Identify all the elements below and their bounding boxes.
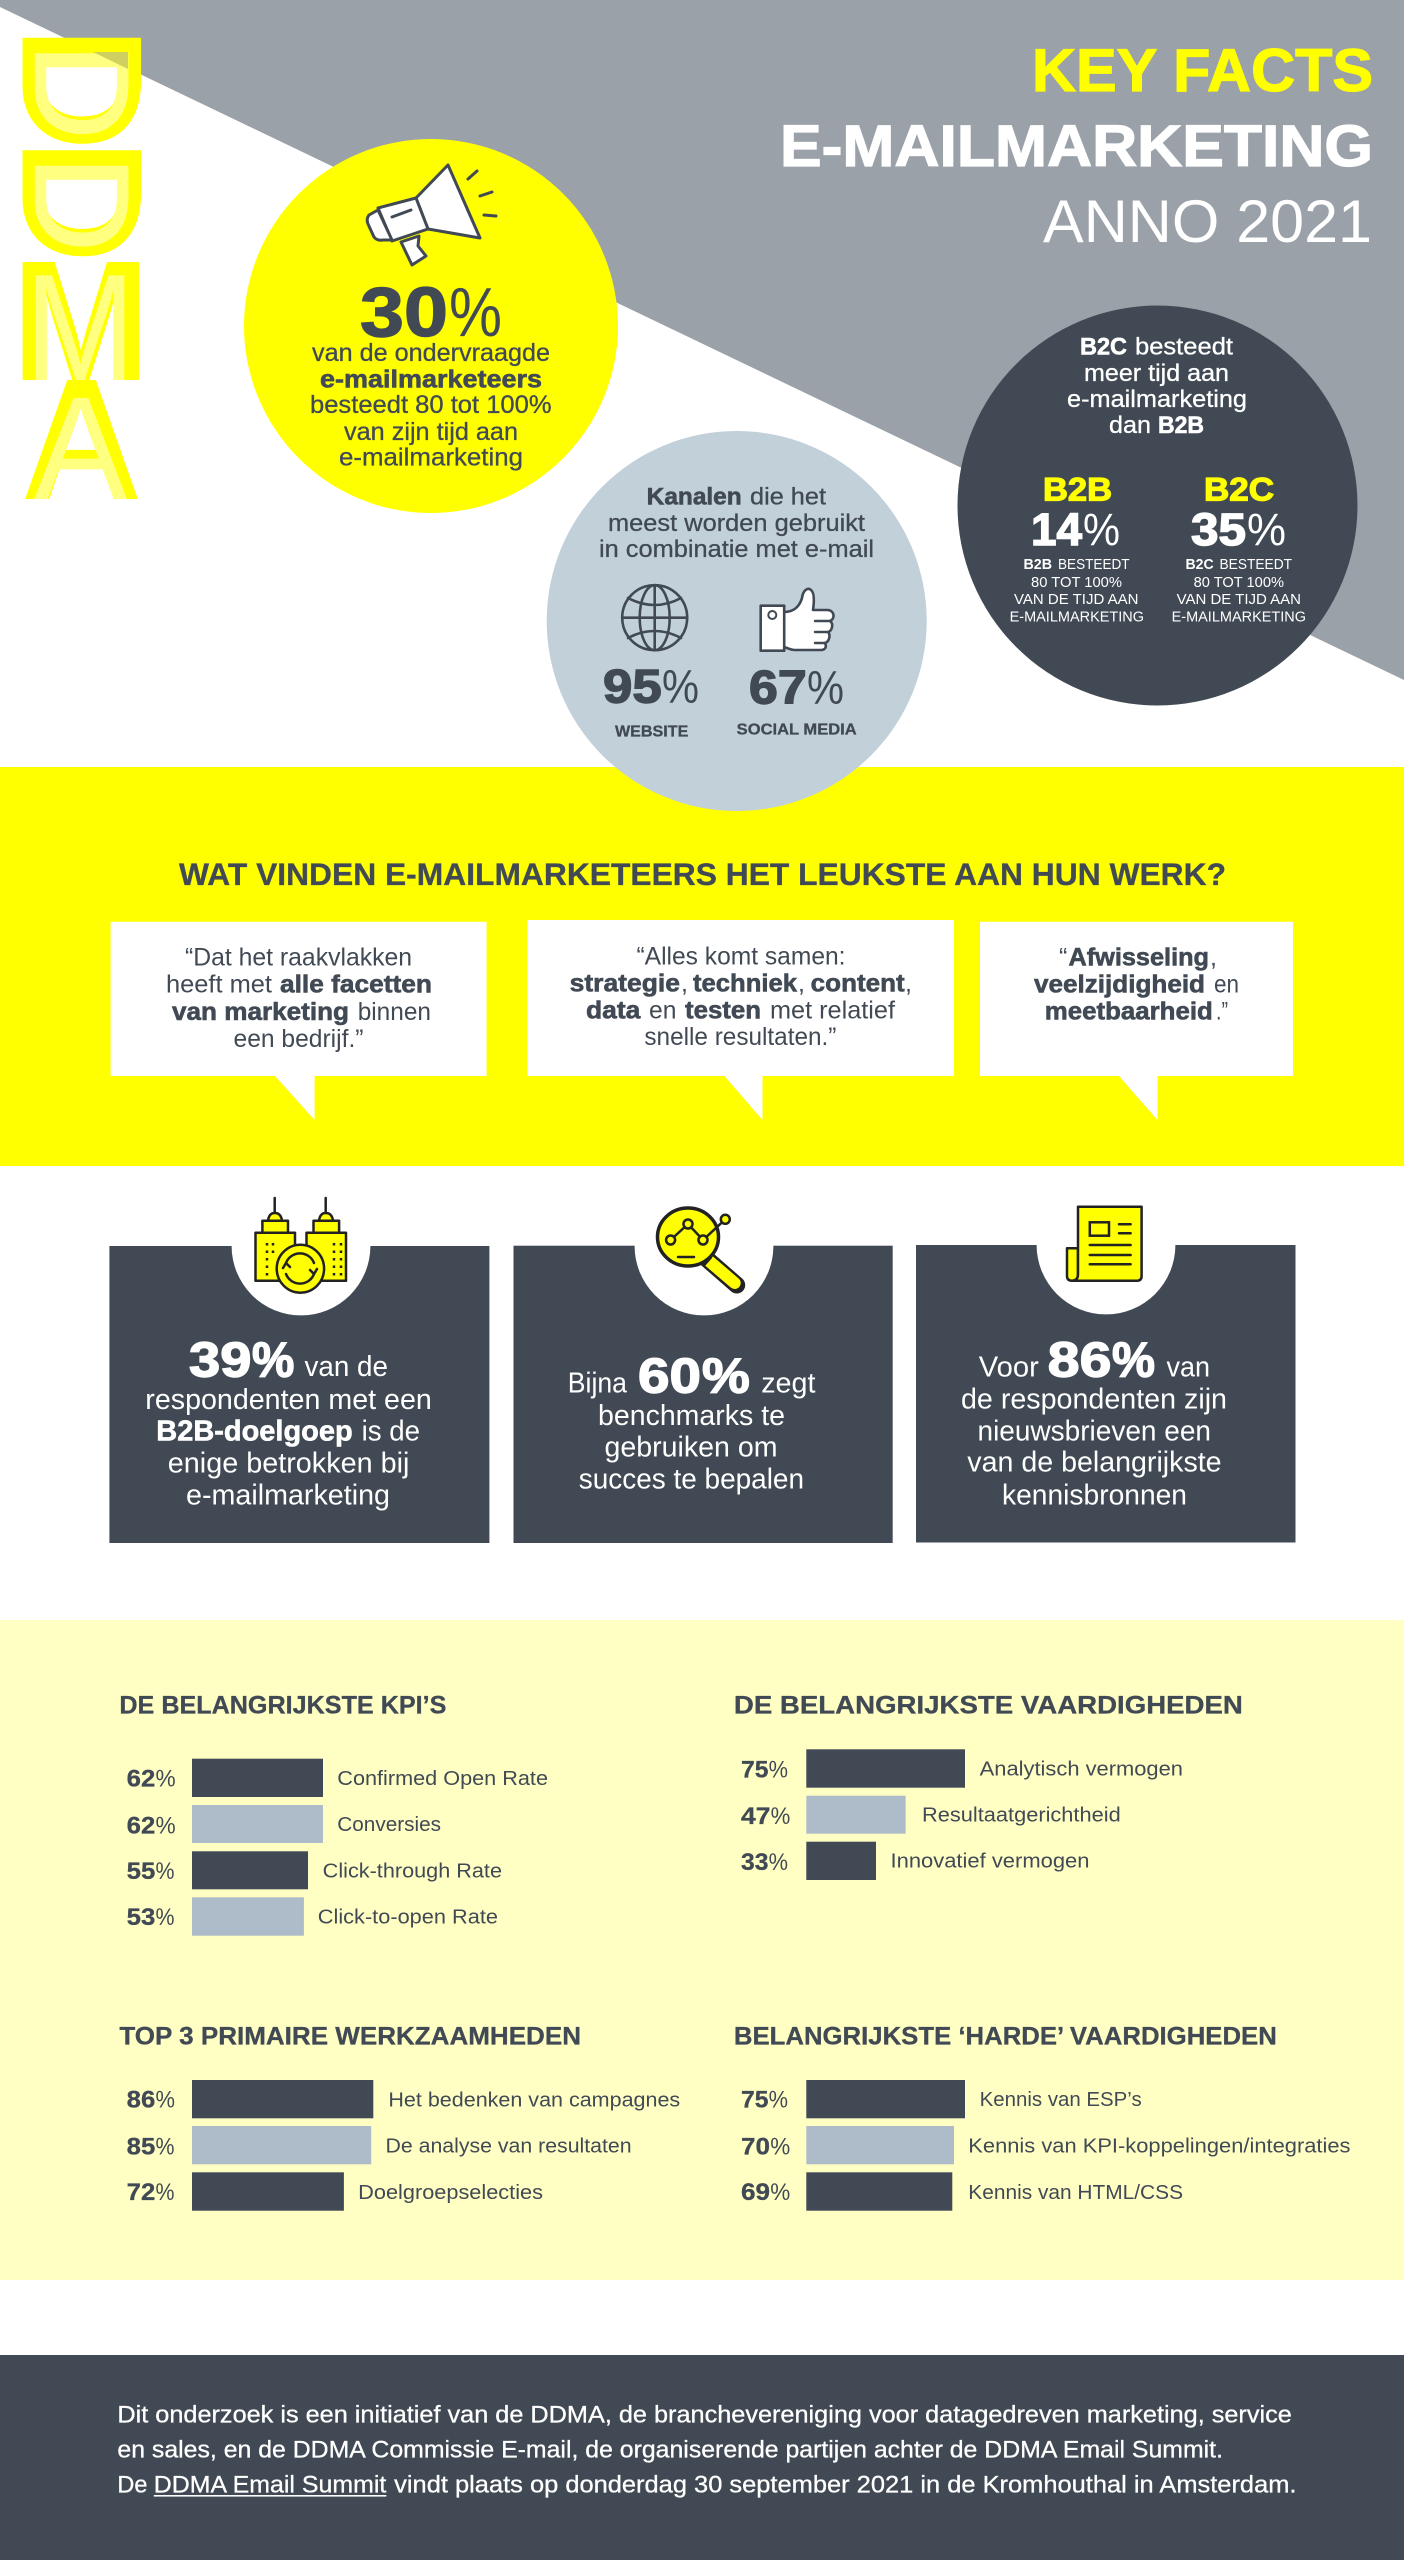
bar row: De analyse van resultaten: % — [156, 2133, 174, 2160]
text: intro: dan — [1109, 412, 1151, 439]
icon: magnifier with graph — [658, 1208, 737, 1285]
heading: KPI's: DE BELANGRIJKSTE KPI’S — [119, 1691, 446, 1719]
bar row: Click-to-open Rate: % — [156, 1904, 174, 1931]
text: card 86%: Voor — [979, 1352, 1039, 1384]
column: B2B 14%: BESTEEDT — [1058, 557, 1130, 573]
bar row: Kennis van ESP's: % — [769, 2087, 788, 2114]
bar row: Innovatief vermogen: 33 — [741, 1849, 768, 1876]
panel: dark circle B2C vs B2B — [958, 306, 1358, 706]
bar row: Analytisch vermogen: Analytisch vermogen — [980, 1759, 1183, 1781]
text: circle description: van zijn tijd aan — [344, 418, 518, 446]
callout: quote 2: snelle resultaten.” — [644, 1023, 836, 1051]
text: card 60% — [568, 1350, 816, 1495]
column: B2B 14%: B2B — [1024, 557, 1052, 573]
bar row: Doelgroepselecties: % — [156, 2179, 174, 2206]
bar row: Conversies — [127, 1805, 441, 1843]
stat: website 95% — [603, 660, 699, 741]
text: circle description — [310, 339, 552, 472]
callout: quote 1: “Dat het raakvlakken — [185, 944, 412, 972]
icon: megaphone — [367, 165, 496, 265]
bar row: Het bedenken van campagnes: Het bedenken van campagnes — [388, 2090, 680, 2112]
bar row: Doelgroepselecties — [127, 2172, 543, 2211]
column: B2B 14%: % — [1083, 504, 1120, 555]
text: card 86%: nieuwsbrieven een — [978, 1416, 1211, 1448]
text: intro: besteedt — [1135, 334, 1233, 360]
chart: top 3 primaire werkzaamheden — [119, 2022, 680, 2211]
bar row: Kennis van ESP's — [741, 2080, 1142, 2118]
column: B2C 35%: E-MAILMARKETING — [1172, 610, 1306, 626]
bar row: Analytisch vermogen: % — [769, 1756, 788, 1783]
callout: quote 2: content — [811, 969, 905, 997]
bar row: Kennis van KPI-koppelingen/integraties: 70 — [741, 2133, 770, 2160]
bar row: Innovatief vermogen — [741, 1842, 1090, 1880]
callout: quote 3: “ — [1059, 944, 1067, 972]
title: Key Facts E-mailmarketing anno 2021: ANNO 2021 — [1043, 188, 1372, 255]
text: channels intro: Kanalen — [647, 483, 742, 510]
bar row: Kennis van KPI-koppelingen/integraties — [741, 2126, 1350, 2164]
bar row: Kennis van HTML/CSS: Kennis van HTML/CSS — [968, 2182, 1183, 2204]
text: intro — [1067, 334, 1247, 439]
text: circle description: e-mailmarketeers — [320, 365, 542, 393]
bar row: Resultaatgerichtheid: % — [771, 1803, 790, 1830]
text: footer note: DDMA Email Summit — [154, 2471, 387, 2498]
bar row: De analyse van resultaten — [127, 2126, 632, 2164]
text: card 86% — [961, 1334, 1227, 1511]
bar row: Kennis van HTML/CSS: % — [770, 2179, 790, 2206]
callout: quote 3: en — [1214, 971, 1239, 999]
text: card 60%: 60 — [638, 1350, 701, 1404]
bar row: Het bedenken van campagnes: % — [156, 2087, 175, 2114]
stat: website 95%: 95 — [603, 660, 662, 713]
bar row: Analytisch vermogen: 75 — [741, 1756, 768, 1783]
logo: DDMA vertical: M — [25, 243, 135, 413]
stat: social media 67% — [737, 660, 857, 738]
heading: werkzaamheden: TOP 3 PRIMAIRE WERKZAAMHEDEN — [119, 2022, 581, 2050]
bar row: Kennis van ESP's: Kennis van ESP’s — [980, 2089, 1142, 2111]
text: intro: meer tijd aan — [1084, 360, 1229, 387]
column: B2B 14%: B2B — [1043, 472, 1112, 508]
callout: quote 3: , — [1210, 944, 1217, 972]
panel: yellow circle 30% — [244, 139, 618, 513]
text: card 39%: 39 — [189, 1334, 251, 1388]
text: card 39%: van de — [304, 1351, 388, 1383]
text: footer note: De — [117, 2471, 147, 2498]
column: B2C 35%: VAN DE TIJD AAN — [1177, 592, 1301, 608]
text: card 60%: succes te bepalen — [579, 1463, 804, 1495]
column: B2C 35%: B2C — [1186, 557, 1214, 573]
callout: quote 3: meetbaarheid — [1045, 997, 1213, 1025]
text: card 86%: van de belangrijkste — [967, 1447, 1222, 1479]
callout: quote 2 — [527, 920, 954, 1120]
column: B2C 35% — [1172, 472, 1306, 626]
text: circle description: van de ondervraagde — [312, 339, 550, 367]
text: card 60%: zegt — [761, 1368, 816, 1400]
text: card 39%: e-mailmarketing — [186, 1479, 390, 1511]
stat: website 95%: WEBSITE — [615, 724, 689, 741]
callout: quote 3: veelzijdigheid — [1034, 971, 1205, 999]
column: B2B 14%: E-MAILMARKETING — [1010, 610, 1144, 626]
bar row: Confirmed Open Rate: Confirmed Open Rate — [337, 1768, 548, 1790]
callout: quote 1 — [111, 922, 487, 1120]
callout: quote 1: alle facetten — [280, 971, 432, 999]
callout: quote 3: .” — [1216, 997, 1228, 1025]
logo: DDMA vertical: D — [6, 156, 156, 252]
bar row: Click-through Rate: Click-through Rate — [323, 1860, 502, 1882]
text: intro: B2C — [1080, 334, 1127, 360]
text: card 86%: % — [1112, 1334, 1155, 1388]
column: B2B 14%: VAN DE TIJD AAN — [1014, 592, 1138, 608]
heading: vaardigheden: DE BELANGRIJKSTE VAARDIGHEDEN — [734, 1691, 1243, 1719]
callout: quote 2: , — [905, 969, 912, 997]
bar row: Click-to-open Rate — [127, 1897, 498, 1936]
bar row: Click-to-open Rate: 53 — [127, 1904, 155, 1931]
title: Key Facts E-mailmarketing anno 2021: E-MAILMARKETING — [780, 114, 1373, 179]
bar row: Resultaatgerichtheid: 47 — [741, 1803, 770, 1830]
heading: harde vaardigheden: BELANGRIJKSTE ‘HARDE’ VAARDIGHEDEN — [734, 2022, 1277, 2050]
text: intro: B2B — [1158, 412, 1204, 439]
callout: quote 3: Afwisseling — [1068, 944, 1209, 972]
stat: 30% — [360, 273, 502, 351]
callout: quote 1: binnen — [358, 998, 431, 1026]
bar row: Innovatief vermogen: Innovatief vermogen — [890, 1851, 1090, 1873]
text: card 39%: % — [252, 1334, 294, 1388]
bar row: Kennis van ESP's: 75 — [741, 2087, 768, 2114]
text: card 39%: enige betrokken bij — [168, 1448, 409, 1480]
column: B2C 35%: % — [1247, 504, 1286, 555]
text: channels intro: meest worden gebruikt — [608, 510, 865, 537]
panel: card 86% — [916, 1176, 1296, 1542]
bar row: Click-through Rate: % — [156, 1858, 174, 1885]
bar row: Doelgroepselecties: 72 — [127, 2179, 155, 2206]
logo: DDMA vertical: M — [12, 225, 150, 417]
icon: buildings with coin — [256, 1198, 346, 1293]
bar row: Analytisch vermogen — [741, 1749, 1183, 1788]
logo: DDMA vertical: A — [21, 344, 142, 537]
text: circle description: e-mailmarketing — [339, 444, 523, 472]
chart: de belangrijkste KPI's — [119, 1691, 548, 1936]
bar row: Doelgroepselecties: Doelgroepselecties — [358, 2182, 543, 2204]
callout: quote 2: techniek — [693, 969, 797, 997]
stat: social media 67%: % — [807, 660, 844, 714]
chart: de belangrijkste vaardigheden — [734, 1691, 1243, 1880]
text: footer note: vindt plaats op donderdag 30 september 2021 in de Kromhouthal in Amsterdam. — [394, 2471, 1296, 2498]
callout: quote 2: “Alles komt samen: — [636, 942, 846, 970]
bar row: De analyse van resultaten: 85 — [127, 2133, 155, 2160]
panel: card 60% — [514, 1177, 893, 1543]
panel: pale yellow charts section — [0, 1620, 1404, 2280]
callout: quote 2: met relatief — [770, 996, 895, 1024]
logo: DDMA vertical: D — [6, 43, 156, 140]
stat: 30%: % — [449, 273, 502, 351]
bar row: Confirmed Open Rate: % — [156, 1766, 176, 1793]
icon: thumbs up — [761, 589, 834, 651]
callout: quote 2: testen — [685, 996, 761, 1024]
bar row: Conversies: Conversies — [337, 1814, 441, 1836]
text: channels intro: die het — [750, 483, 826, 510]
text: card 86%: kennisbronnen — [1002, 1479, 1187, 1511]
bar row: Confirmed Open Rate — [127, 1759, 548, 1797]
text: intro: e-mailmarketing — [1067, 386, 1247, 413]
text: channels intro — [599, 483, 874, 563]
bar row: Innovatief vermogen: % — [769, 1849, 788, 1876]
stat: website 95%: % — [662, 660, 699, 713]
icon: newspaper — [1067, 1207, 1142, 1281]
column: B2C 35%: BESTEEDT — [1220, 557, 1292, 573]
callout: quote 2: strategie — [570, 969, 680, 997]
column: B2B 14%: 14 — [1031, 504, 1082, 555]
callout: quote 2: , — [798, 969, 805, 997]
bar row: Confirmed Open Rate: 62 — [127, 1766, 155, 1793]
callout: quote 1: van marketing — [172, 998, 349, 1026]
text: footer note: en sales, en de DDMA Commissie E-mail, de organiserende partijen achter de DDMA Email Summit. — [117, 2437, 1223, 2464]
bar row: Het bedenken van campagnes: 86 — [127, 2087, 155, 2114]
callout: quote 2: en — [649, 996, 676, 1024]
bar row: Kennis van KPI-koppelingen/integraties: % — [770, 2133, 790, 2160]
chart: belangrijkste harde vaardigheden — [734, 2022, 1350, 2211]
stat: social media 67%: 67 — [749, 660, 807, 714]
text: card 39% — [145, 1334, 432, 1511]
text: card 39%: B2B-doelgoep — [156, 1416, 353, 1448]
bar row: Conversies: 62 — [127, 1812, 155, 1839]
panel: footer — [0, 2355, 1404, 2560]
bar row: Resultaatgerichtheid: Resultaatgerichtheid — [922, 1805, 1121, 1827]
text: card 39%: is de — [362, 1416, 420, 1448]
text: footer note: Dit onderzoek is een initiatief van de DDMA, de branchevereniging voor datagedreven marketing, service — [117, 2402, 1292, 2429]
bar row: Kennis van HTML/CSS — [741, 2172, 1183, 2211]
text: card 86%: de respondenten zijn — [961, 1383, 1227, 1415]
text: circle description: besteedt 80 tot 100% — [310, 391, 552, 419]
text: footer note — [117, 2402, 1296, 2498]
text: channels intro: in combinatie met e-mail — [599, 536, 874, 563]
text: card 86%: 86 — [1048, 1334, 1111, 1388]
panel: yellow quote band — [0, 767, 1404, 1166]
callout: quote 2: , — [681, 969, 688, 997]
panel: blue circle channels — [547, 431, 927, 811]
text: card 60%: % — [702, 1350, 750, 1404]
bar row: Click-to-open Rate: Click-to-open Rate — [318, 1906, 498, 1928]
column: B2B 14% — [1010, 472, 1144, 626]
bar row: Conversies: % — [156, 1812, 176, 1839]
bar row: Kennis van HTML/CSS: 69 — [741, 2179, 770, 2206]
column: B2C 35%: B2C — [1204, 472, 1274, 508]
text: card 39%: respondenten met een — [145, 1384, 432, 1416]
stat: social media 67%: SOCIAL MEDIA — [737, 721, 857, 738]
column: B2B 14%: 80 TOT 100% — [1031, 575, 1122, 591]
panel: card 39% — [109, 1177, 489, 1543]
text: card 60%: benchmarks te — [598, 1400, 785, 1432]
bar row: Het bedenken van campagnes — [127, 2080, 680, 2118]
column: B2C 35%: 35 — [1191, 504, 1246, 555]
logo: DDMA vertical — [0, 28, 176, 537]
logo: DDMA vertical: A — [34, 367, 128, 531]
bar row: Click-through Rate — [127, 1851, 502, 1889]
icon: globe — [622, 585, 687, 650]
bar row: Kennis van KPI-koppelingen/integraties: Kennis van KPI-koppelingen/integraties — [968, 2135, 1350, 2157]
callout: quote 3 — [980, 922, 1293, 1120]
text: card 60%: gebruiken om — [604, 1432, 778, 1464]
title: Key Facts E-mailmarketing anno 2021: KEY FACTS — [1032, 37, 1373, 104]
background: grey diagonal wedge — [0, 0, 1404, 680]
text: card 60%: Bijna — [568, 1368, 628, 1400]
bar row: De analyse van resultaten: De analyse van resultaten — [386, 2136, 632, 2158]
heading: quotes: WAT VINDEN E-MAILMARKETEERS HET LEUKSTE AAN HUN WERK? — [179, 856, 1226, 892]
column: B2C 35%: 80 TOT 100% — [1194, 575, 1284, 591]
title: Key Facts E-mailmarketing anno 2021 — [780, 37, 1373, 255]
stat: 30%: 30 — [360, 273, 448, 351]
callout: quote 1: heeft met — [166, 971, 272, 999]
bar row: Resultaatgerichtheid — [741, 1796, 1121, 1834]
callout: quote 2: data — [586, 996, 642, 1024]
text: card 86%: van — [1166, 1352, 1210, 1384]
bar row: Click-through Rate: 55 — [127, 1858, 155, 1885]
callout: quote 1: een bedrijf.” — [234, 1025, 364, 1053]
